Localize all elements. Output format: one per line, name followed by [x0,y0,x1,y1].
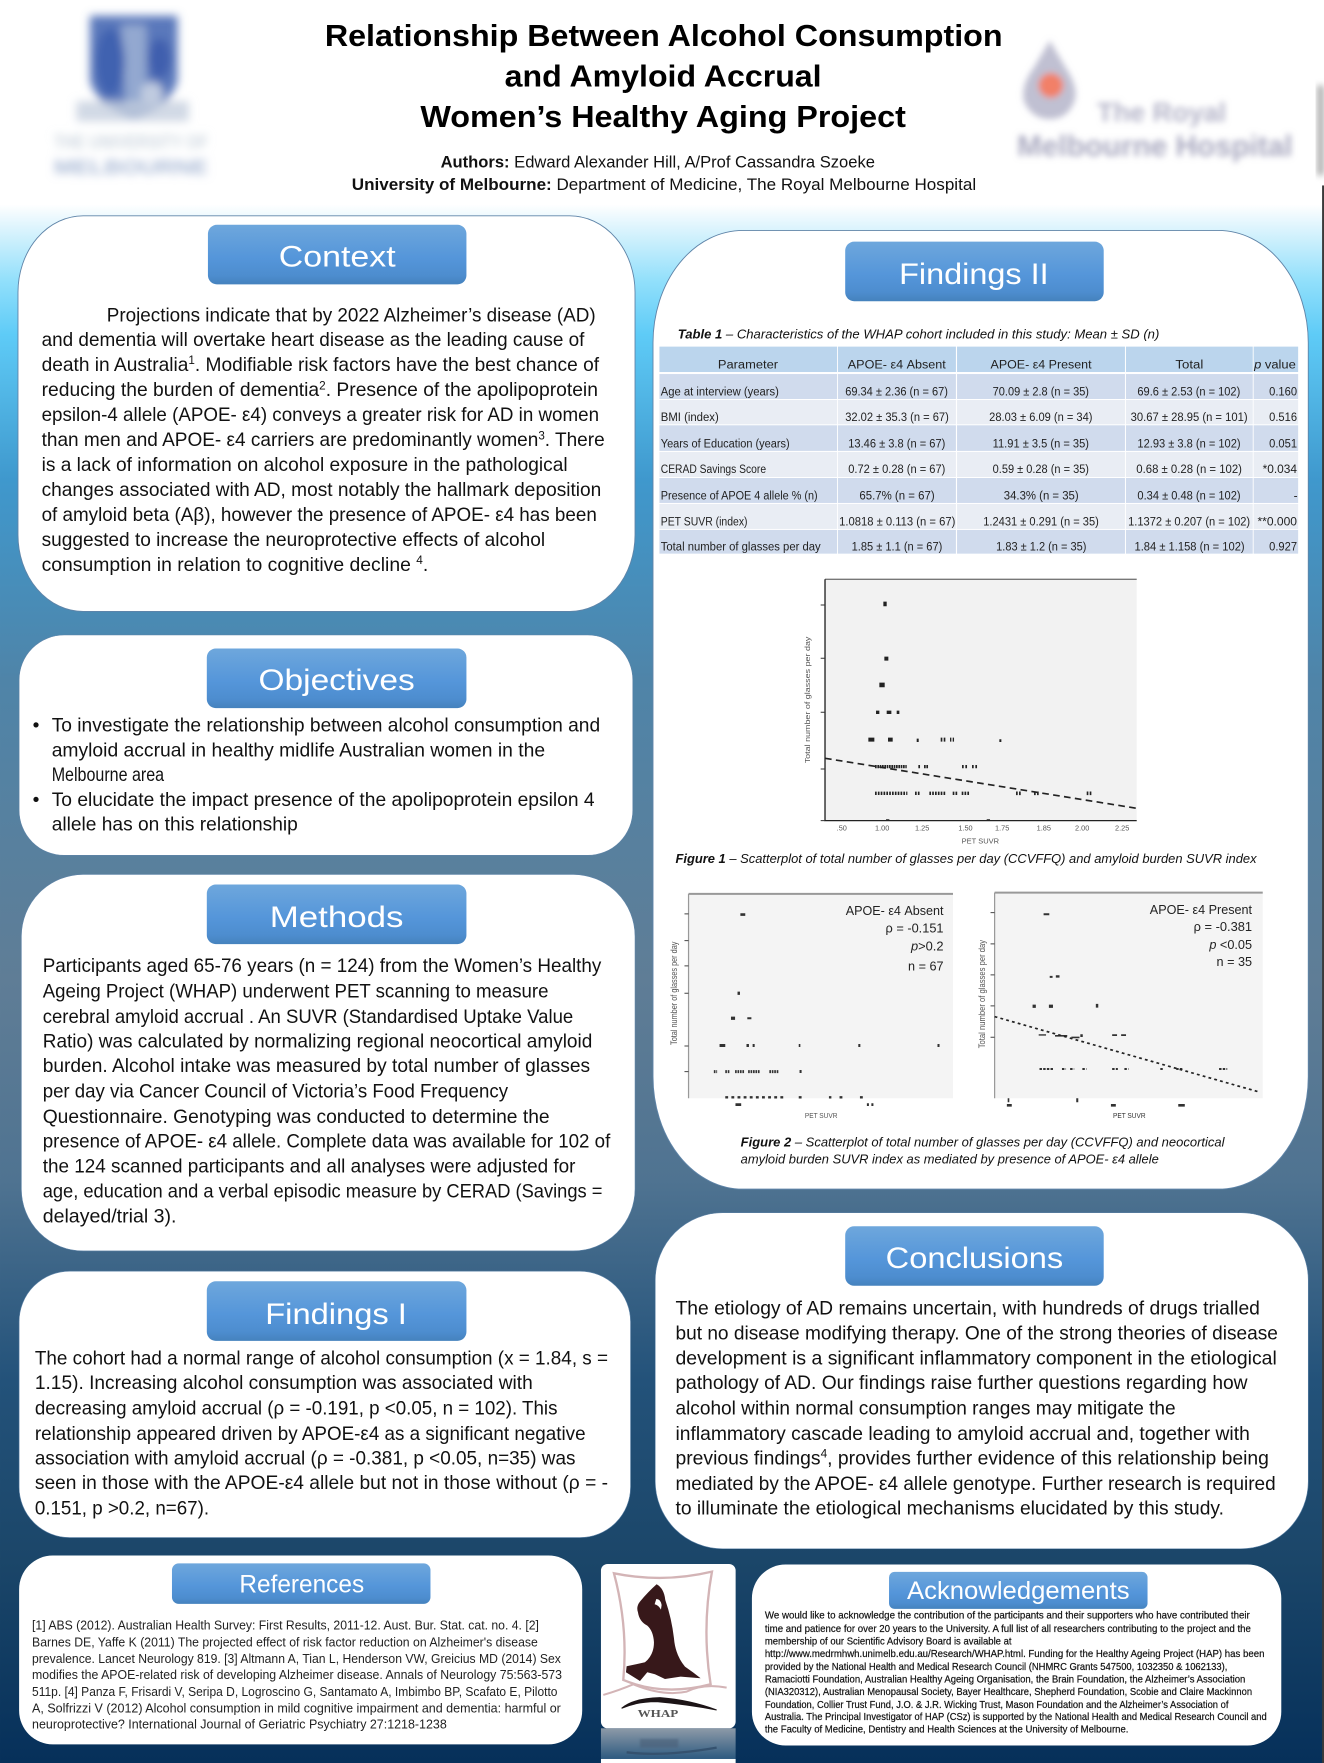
methods text: cerebral amyloid accrual . An SUVR (Standardised Uptake Value [43,1007,573,1028]
heading: acknowledgements [889,1572,1148,1609]
acknowledgements text: provided by the National Health and Medical Research Council (NHMRC Grants 547500, 1032350 & 1062133), [765,1662,1227,1673]
title: and Amyloid Accrual [505,59,822,94]
conclusions text: The etiology of AD remains uncertain, with hundreds of drugs trialled [675,1298,1260,1319]
figure 2 left scatterplot: APOE e4 absent: Total number of glasses per day [669,941,679,1045]
acknowledgements text: We would like to acknowledge the contribution of the participants and their supporters who have contributed their [765,1610,1250,1621]
conclusions text: pathology of AD. Our findings raise further questions regarding how [675,1373,1248,1394]
conclusions text: 4 [821,1447,828,1461]
APOE e4 absent statistics: ρ = -0.151 [886,920,944,935]
findings I text: 0.151, p >0.2, n=67). [35,1498,209,1519]
acknowledgements text: Ramaciotti Foundation, Australian Healthy Ageing Organisation, the Brain Foundation, the Alzheimer’s Association [765,1675,1245,1686]
context text: . Presence of the apolipoprotein [326,380,598,401]
table row: CERAD: 0.72 ± 0.28 (n = 67) [848,462,945,476]
references text [32,1618,562,1732]
heading: methods: Methods [270,901,403,934]
table row: CERAD: 0.68 ± 0.28 (n = 102) [1136,462,1242,476]
table row: age: 69.34 ± 2.36 (n = 67) [845,385,948,399]
acknowledgements text: membership of our Scientific Advisory Board is available at [765,1636,1012,1647]
table row: education [661,436,1297,450]
table row: BMI: BMI (index) [661,410,719,424]
figure 2 caption: Figure 2 – Scatterplot of total number of glasses per day (CCVFFQ) and neocortical [741,1135,1226,1149]
logo: Royal Melbourne Hospital: The Royal [1097,97,1226,127]
findings I text: 1.15). Increasing alcohol consumption was associated with [35,1373,533,1394]
table row: BMI: 32.02 ± 35.3 (n = 67) [845,410,949,424]
methods text: delayed/trial 3). [43,1206,176,1227]
table header row: APOE- ε4 Present [991,358,1092,372]
logo: Royal Melbourne Hospital: Melbourne Hospital [1017,131,1293,163]
figure 1 scatterplot: 1.85 [1037,824,1051,833]
references text: Barnes DE, Yaffe K (2011) The projected effect of risk factor reduction on Alzheimer's disease [32,1635,538,1650]
conclusions text: but no disease modifying therapy. One of the strong theories of disease [675,1324,1278,1345]
APOE e4 absent statistics: APOE- ε4 Absent [846,903,944,918]
references text: prevalence. Lancet Neurology 819. [3] Altmann A, Tian L, Henderson VW, Greicius MD (2014) Sex [32,1651,561,1666]
table caption: Table 1 – Characteristics of the WHAP cohort included in this study: Mean ± SD (n) [678,327,1159,341]
table 1 [659,347,1298,554]
acknowledgements text: the Faculty of Medicine, Dentistry and Health Sciences at the University of Melbourne. [765,1725,1128,1736]
context text: than men and APOE- ε4 carriers are predominantly women [42,430,547,451]
table header row: Parameter [718,358,778,372]
methods text: Ageing Project (WHAP) underwent PET scanning to measure [43,981,548,1002]
findings I text [35,1348,608,1519]
references text: 511p. [4] Panza F, Frisardi V, Seripa D, Logroscino G, Santamato A, Imbimbo BP, Scafato E, Pilotto [32,1684,557,1699]
context text: 4 [416,553,423,567]
heading: methods [207,885,466,944]
APOE e4 absent statistics: p>0.2 [910,938,944,953]
title [325,18,1003,134]
methods text: the 124 scanned participants and all analyses were adjusted for [43,1156,576,1177]
conclusions text: mediated by the APOE- ε4 allele genotype. Further research is required [675,1474,1276,1495]
objectives list: • [33,716,39,737]
context text: . There [545,430,605,451]
context text: . Modifiable risk factors have the best chance of [195,355,600,376]
table row: APOE 4 allele: Presence of APOE 4 allele % (n) [661,489,818,503]
figure 1 scatterplot [803,579,1137,845]
table row: PET SUVR [661,514,1297,528]
heading: conclusions: Conclusions [886,1242,1063,1275]
table row: glasses per day: 1.85 ± 1.1 (n = 67) [852,540,942,554]
table row: CERAD: *0.034 [1263,462,1297,476]
findings I text: association with amyloid accrual (ρ = -0.381, p <0.05, n=35) was [35,1448,575,1469]
panel: findings I [19,1271,631,1538]
figure 2 caption [741,1135,1226,1166]
objectives list [33,716,600,836]
context text: Projections indicate that by 2022 Alzheimer’s disease (AD) [107,305,596,326]
context text: suggested to increase the neuroprotective effects of alcohol [42,530,545,551]
context text: 2 [319,378,326,392]
acknowledgements text: time and patience for over 20 years to the University. A full list of all researchers contributing to the project and the [765,1624,1251,1635]
conclusions text: to illuminate the etiological mechanisms elucidated by this study. [675,1498,1224,1519]
table row: age: 0.160 [1269,385,1297,399]
methods text: age, education and a verbal episodic measure by CERAD (Savings = [43,1182,602,1203]
table row: CERAD [661,462,1297,476]
figure 1 scatterplot: Total number of glasses per day [803,636,812,763]
figure 1 scatterplot: 1.75 [995,824,1009,833]
conclusions text: inflammatory cascade leading to amyloid accrual and, together with [675,1424,1250,1445]
figure 1 scatterplot: 2.00 [1075,824,1089,833]
APOE e4 present statistics: APOE- ε4 Present [1150,902,1252,917]
findings I text: relationship appeared driven by APOE-ε4 as a significant negative [35,1424,586,1445]
objectives list: To investigate the relationship between alcohol consumption and [52,716,600,737]
authors and affiliation: University of Melbourne: Department of Medicine, The Royal Melbourne Hospital [352,176,976,194]
table header row [718,358,1296,372]
findings I text: decreasing amyloid accrual (ρ = -0.191, p <0.05, n = 102). This [35,1398,557,1419]
panel: findings II [653,230,1308,1189]
conclusions text [675,1298,1278,1519]
panel: references [19,1556,582,1744]
references text: A, Solfrizzi V (2012) Alcohol consumption in mild cognitive impairment and dementia: harmful or [32,1700,561,1715]
methods text [43,956,611,1227]
conclusions text: development is a significant inflammatory component in the etiological [675,1348,1277,1369]
figure 2 left scatterplot: APOE e4 absent [669,894,953,1120]
context text: consumption in relation to cognitive decline [42,555,410,576]
table row: APOE 4 allele: 34.3% (n = 35) [1004,489,1079,503]
panel: conclusions [655,1213,1308,1549]
table row: PET SUVR: 1.2431 ± 0.291 (n = 35) [983,514,1099,528]
acknowledgements text: Australia. The Principal Investigator of HAP (CSz) is supported by the National Health and Medical Research Council and [765,1712,1267,1723]
table row: PET SUVR: 1.1372 ± 0.207 (n = 102) [1128,514,1250,528]
context text: changes associated with AD, most notably the hallmark deposition [42,480,601,501]
heading: findings I [207,1281,466,1341]
acknowledgements text: http://www.medrmhwh.unimelb.edu.au/Research/WHAP.html. Funding for the Healthy Ageing Project (HAP) has been [765,1649,1264,1660]
table row: CERAD: CERAD Savings Score [661,462,766,476]
table row: glasses per day: Total number of glasses per day [661,540,821,554]
heading: findings I: Findings I [265,1298,407,1331]
acknowledgements text: Foundation, Collier Trust Fund, J.O. & J.R. Wicking Trust, Mason Foundation and the Alzheimer’s Association of [765,1700,1229,1711]
methods text: Questionnaire. Genotyping was conducted to determine the [43,1107,550,1128]
objectives list: Melbourne area [52,765,164,786]
figure 1 scatterplot: .50 [837,824,847,833]
heading: findings II [845,242,1104,301]
objectives list: allele has on this relationship [52,815,298,836]
figure 1 caption: Figure 1 – Scatterplot of total number of glasses per day (CCVFFQ) and amyloid burden SUVR index [675,852,1257,866]
table row: BMI: 30.67 ± 28.95 (n = 101) [1131,410,1248,424]
figure 1 scatterplot: 1.25 [915,824,929,833]
table row: glasses per day [661,540,1297,554]
table header row: APOE- ε4 Absent [848,358,947,372]
table row: education: 11.91 ± 3.5 (n = 35) [993,436,1089,450]
figure 2 right scatterplot: APOE e4 present: PET SUVR [1113,1112,1146,1120]
figure 2 left scatterplot: APOE e4 absent: PET SUVR [805,1112,838,1120]
table row: APOE 4 allele: - [1294,489,1298,503]
heading: acknowledgements: Acknowledgements [907,1578,1130,1605]
figure 2 caption: amyloid burden SUVR index as mediated by presence of APOE- ε4 allele [741,1152,1159,1166]
references text: modifies the APOE-related risk of developing Alzheimer disease. Annals of Neurology 75:563-573 [32,1667,562,1682]
APOE e4 present statistics: n = 35 [1217,954,1252,969]
panel: methods [21,874,635,1251]
table row: BMI [661,410,1297,424]
heading: objectives [207,649,466,708]
heading: objectives: Objectives [259,664,415,697]
acknowledgements text: (NIA320312), Australian Menopausal Society, Bayer Healthcare, Shepherd Foundation, Scobie and Claire Mackinnon [765,1687,1252,1698]
logo: University of Melbourne: MELBOURNE [54,157,208,179]
table row: PET SUVR: PET SUVR (index) [661,514,748,528]
authors and affiliation [352,153,976,194]
conclusions text: alcohol within normal consumption ranges may mitigate the [675,1398,1176,1419]
authors and affiliation: Authors: Edward Alexander Hill, A/Prof Cassandra Szoeke [441,153,875,171]
table row: glasses per day: 1.84 ± 1.158 (n = 102) [1135,540,1245,554]
table row: glasses per day: 0.927 [1269,540,1297,554]
context text: 3 [538,428,545,442]
figure 1 scatterplot: PET SUVR [962,836,999,845]
table row: CERAD: 0.59 ± 0.28 (n = 35) [993,462,1089,476]
table row: age: 70.09 ± 2.8 (n = 35) [993,385,1089,399]
logo: University of Melbourne [54,16,208,179]
table row: glasses per day: 1.83 ± 1.2 (n = 35) [996,540,1086,554]
APOE e4 present statistics: ρ = -0.381 [1194,919,1252,934]
references text: [1] ABS (2012). Australian Health Survey: First Results, 2011-12. Aust. Bur. Stat. cat. no. 4. [2] [32,1618,539,1633]
table row: education: 0.051 [1269,436,1297,450]
context text: of amyloid beta (Aβ), however the presence of APOE- ε4 has been [42,505,597,526]
APOE e4 absent statistics: n = 67 [908,959,944,974]
table row: age: 69.6 ± 2.53 (n = 102) [1137,385,1240,399]
objectives list: To elucidate the impact presence of the apolipoprotein epsilon 4 [52,790,595,811]
findings I text: The cohort had a normal range of alcohol consumption (x = 1.84, s = [35,1348,608,1369]
heading: context [208,225,466,284]
heading: references: References [239,1572,364,1599]
logo: University of Melbourne: THE UNIVERSITY OF [54,132,208,153]
figure 1 scatterplot: 1.50 [958,824,973,833]
heading: references [172,1563,430,1604]
table row: APOE 4 allele: 65.7% (n = 67) [859,489,935,503]
table row: education: Years of Education (years) [661,436,790,450]
table row: education: 13.46 ± 3.8 (n = 67) [848,436,945,450]
context text: . [423,555,428,576]
table header row: Total [1175,358,1203,372]
table row: PET SUVR: 1.0818 ± 0.113 (n = 67) [839,514,955,528]
heading: findings II: Findings II [899,258,1049,291]
table row: PET SUVR: **0.000 [1257,514,1297,528]
methods text: burden. Alcohol intake was measured by total number of glasses [43,1056,590,1077]
conclusions text: , provides further evidence of this relationship being [827,1448,1269,1469]
logo: Royal Melbourne Hospital [1017,40,1293,163]
conclusions text: previous findings [675,1448,821,1469]
objectives list: • [33,790,39,811]
methods text: per day via Cancer Council of Victoria’s Food Frequency [43,1082,508,1103]
heading: context: Context [279,240,396,273]
APOE e4 present statistics [1150,902,1252,969]
findings I text: seen in those with the APOE-ε4 allele but not in those without (ρ = - [35,1473,608,1494]
figure 2 right scatterplot: APOE e4 present: Total number of glasses per day [977,939,987,1048]
table row: age: Age at interview (years) [661,385,779,399]
context text: epsilon-4 allele (APOE- ε4) conveys a greater risk for AD in women [42,405,599,426]
figure 1 scatterplot: 1.00 [875,824,889,833]
panel: context [18,216,635,611]
context text: and dementia will overtake heart disease as the leading cause of [42,330,585,351]
table header row: p value [1253,358,1296,372]
objectives list: amyloid accrual in healthy midlife Australian women in the [52,740,545,761]
methods text: Ratio) was calculated by normalizing regional neocortical amyloid [43,1032,592,1053]
context text [42,305,605,576]
title: Relationship Between Alcohol Consumption [325,18,1003,53]
title: Women’s Healthy Aging Project [420,99,906,134]
heading: conclusions [845,1226,1104,1286]
context text: 1 [188,353,195,367]
panel: objectives [19,635,633,855]
figure 1 scatterplot: 2.25 [1115,824,1129,833]
table row: BMI: 0.516 [1269,410,1297,424]
context text: death in Australia [42,355,190,376]
APOE e4 absent statistics [846,903,944,974]
context text: is a lack of information on alcohol exposure in the pathological [42,455,568,476]
table row: education: 12.93 ± 3.8 (n = 102) [1137,436,1241,450]
table row: APOE 4 allele: 0.34 ± 0.48 (n = 102) [1137,489,1241,503]
APOE e4 present statistics: p <0.05 [1208,937,1252,952]
table row: APOE 4 allele [661,489,1298,503]
panel: acknowledgements [752,1565,1281,1745]
figure 2 right scatterplot: APOE e4 present [977,893,1263,1120]
methods text: presence of APOE- ε4 allele. Complete data was available for 102 of [43,1132,611,1153]
logo: WHAP: WHAP [638,1709,678,1720]
context text: reducing the burden of dementia [42,380,320,401]
acknowledgements text [765,1610,1267,1736]
table row: BMI: 28.03 ± 6.09 (n = 34) [989,410,1092,424]
logo: WHAP [601,1564,736,1763]
table row: age [661,385,1297,399]
references text: neuroprotective? International Journal of Geriatric Psychiatry 27:1218-1238 [32,1717,447,1732]
methods text: Participants aged 65-76 years (n = 124) from the Women’s Healthy [43,956,602,977]
